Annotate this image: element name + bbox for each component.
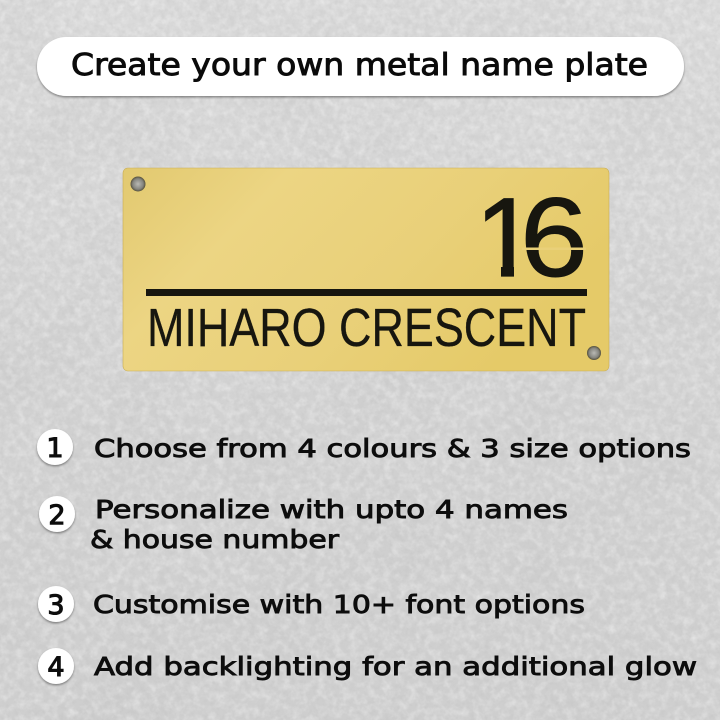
text: colours and sizes: Choose from 4 colours & 3 size options xyxy=(94,434,691,463)
panel: gold name plate xyxy=(123,168,609,371)
house number 16: 1 xyxy=(475,175,537,300)
number badge 2 xyxy=(39,496,75,532)
list item 1 xyxy=(37,429,691,465)
list item 3 xyxy=(38,586,585,622)
text: backlighting: Add backlighting for an additional glow xyxy=(94,652,697,681)
number badge 4: 4 xyxy=(47,652,65,683)
divider bar xyxy=(146,289,587,296)
list item 2 xyxy=(39,495,568,554)
number badge 4 xyxy=(38,648,74,684)
text: personalize xyxy=(90,495,568,554)
number badge 2: 2 xyxy=(48,500,66,531)
text: fonts: Customise with 10+ font options xyxy=(93,590,585,619)
list item 4 xyxy=(38,648,697,684)
title: Create your own metal name plate xyxy=(71,48,648,83)
house number 16: 6 xyxy=(520,175,588,300)
text: personalize: & house number xyxy=(90,525,340,554)
heading pill xyxy=(37,37,684,96)
house number 16 xyxy=(485,197,586,278)
number badge 3 xyxy=(38,586,74,622)
text: personalize: Personalize with upto 4 names xyxy=(95,495,568,524)
icon: top-left screw xyxy=(130,176,146,192)
number badge 1 xyxy=(37,429,73,465)
icon: bottom-right screw xyxy=(587,346,601,360)
number badge 1: 1 xyxy=(46,433,64,464)
street name: MIHARO CRESCENT xyxy=(147,298,586,358)
number badge 3: 3 xyxy=(47,590,65,621)
